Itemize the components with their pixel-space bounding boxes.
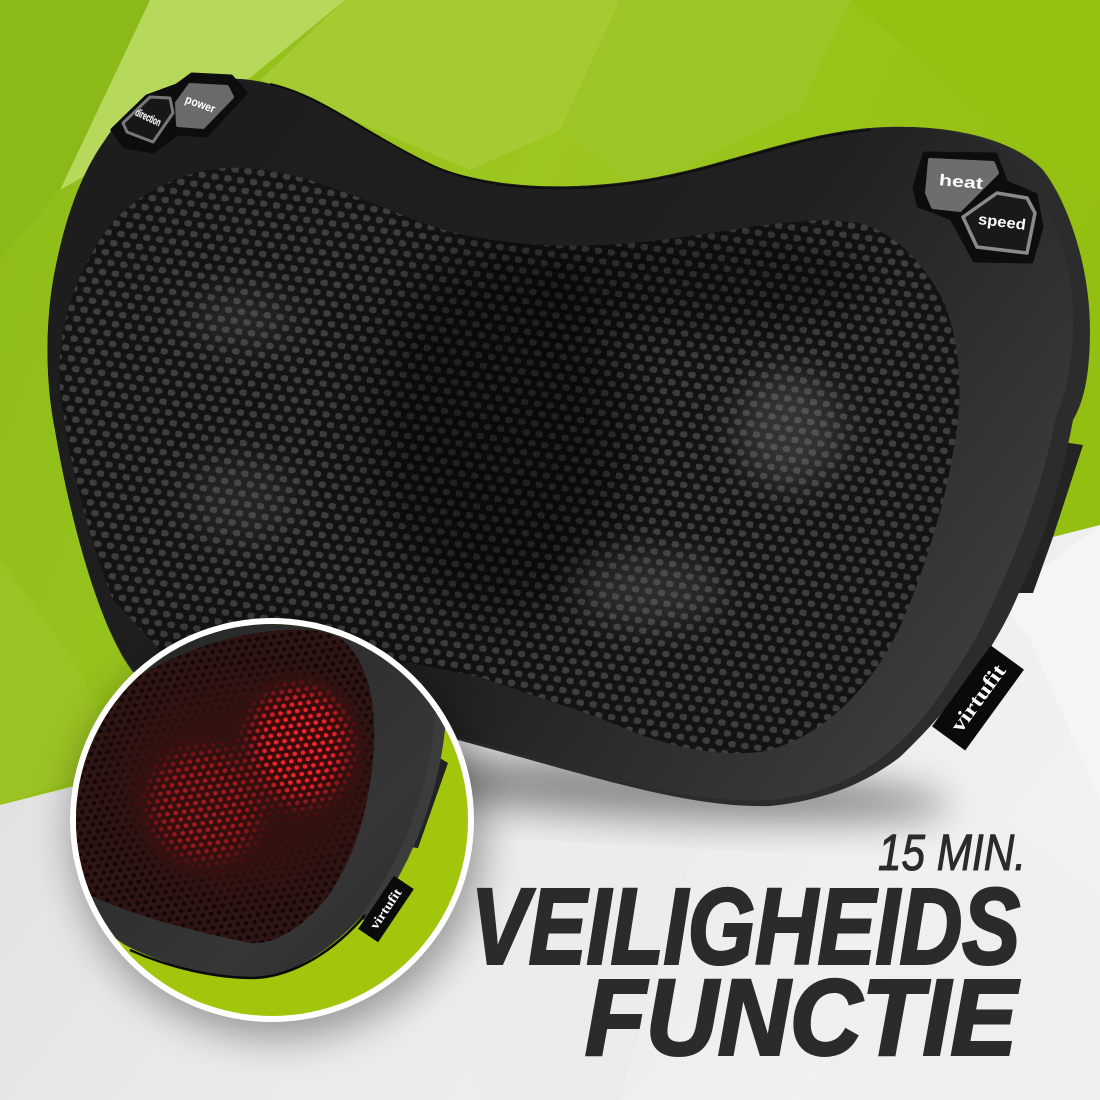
pillow fabric shell <box>48 79 1090 806</box>
pillow leather body <box>48 79 1073 800</box>
inset virtufit tag: virtufit <box>367 885 405 932</box>
headline <box>471 824 1026 1078</box>
red heat glow <box>108 667 374 902</box>
virtufit tag: virtufit <box>945 659 1011 737</box>
inset pillow body <box>76 624 437 977</box>
inset green background <box>76 624 468 1016</box>
left control buttons <box>113 75 245 151</box>
inset seam <box>130 915 365 978</box>
virtufit tag <box>932 645 1024 751</box>
inset virtufit tag <box>358 876 414 942</box>
inset circle shadow <box>72 626 484 1038</box>
right control buttons <box>915 154 1041 261</box>
mesh shading <box>185 230 870 630</box>
top seam <box>270 84 870 188</box>
subtitle: 15 min.: 15 MIN. <box>878 824 1026 881</box>
title line 2: FUNCTIE <box>585 956 1020 1078</box>
green background with facets <box>0 0 1100 830</box>
power button: power <box>183 92 218 116</box>
inset circle: heated pillow close-up <box>50 600 474 1022</box>
direction button: direction <box>133 107 163 129</box>
inset fabric strap <box>410 758 448 848</box>
pillow drop shadow <box>349 746 951 834</box>
inset fabric edge <box>364 712 441 920</box>
inset ring <box>70 618 474 1022</box>
inset mesh <box>50 630 374 943</box>
white lower background with facets <box>0 525 1100 1100</box>
massage pillow <box>48 75 1090 806</box>
mesh panel <box>59 168 959 753</box>
speed button: speed <box>977 211 1027 234</box>
heat button: heat <box>938 172 984 193</box>
side fabric strap <box>1012 442 1083 593</box>
